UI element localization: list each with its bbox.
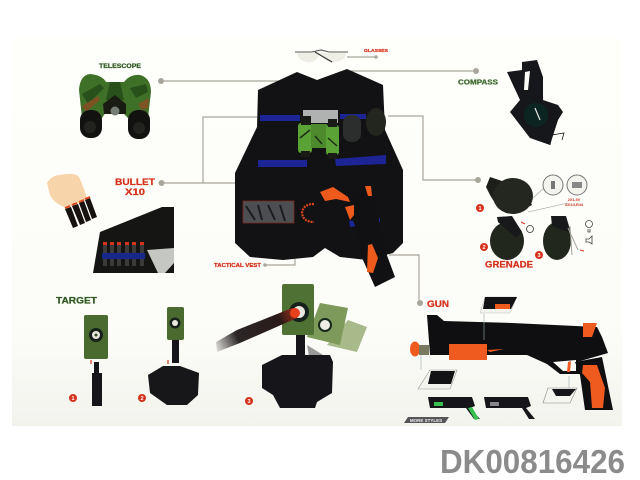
grenade 1 [476, 177, 533, 214]
heading: telescope: TELESCOPE [99, 63, 142, 70]
gun callout top [480, 297, 517, 340]
connector lines [158, 55, 481, 306]
badge 3 [245, 397, 253, 405]
trigger guard opening [553, 360, 576, 371]
target step 2 [138, 307, 199, 405]
tactical vest [235, 69, 403, 287]
vest holster gun [320, 185, 395, 287]
grenade battery callouts: 2X1.5V [568, 198, 580, 202]
badge 2: 2 [140, 396, 144, 402]
gun [410, 315, 613, 410]
icon: fist with bullet wristband [47, 174, 97, 228]
heading: bullet x10 [115, 177, 155, 198]
badge 1: 1 [71, 396, 75, 402]
icon: telescope binoculars [79, 74, 151, 139]
gun callout right [543, 376, 577, 403]
vest pocket [243, 201, 294, 223]
heading: compass: COMPASS [458, 80, 498, 86]
target step 3 [216, 284, 367, 408]
heading: tactical vest: TACTICAL VEST [214, 263, 262, 269]
background panel [12, 38, 622, 426]
vest binoculars [298, 110, 339, 159]
more styles badge [404, 417, 449, 423]
badge 1: 1 [478, 206, 482, 212]
heading: bullet x10: X10 [125, 187, 145, 198]
grenade battery callouts: AG13,R44 [565, 203, 584, 207]
grenade 3 [535, 216, 584, 260]
heading: bullet x10: BULLET [115, 177, 155, 188]
grenade battery callouts [528, 175, 587, 212]
vest compass [343, 115, 361, 142]
gun muzzle [410, 342, 420, 356]
gun orange parts [449, 344, 487, 360]
vest body [235, 69, 403, 260]
badge 3: 3 [247, 399, 251, 405]
heading: target: TARGET [56, 296, 98, 306]
heading: grenade: GRENADE [485, 260, 533, 270]
icon: compass [507, 60, 564, 145]
vest patch [302, 204, 314, 222]
gun grip [575, 357, 613, 410]
gun style grey [484, 397, 535, 419]
grenade 2 [480, 216, 534, 260]
icon: glasses [295, 50, 348, 62]
badge 3: 3 [537, 253, 541, 259]
heading: glasses: GLASSES [364, 48, 389, 54]
product code: DK00816426 [440, 443, 625, 480]
vest grenade [366, 108, 386, 136]
icon: bullet pouch [93, 207, 174, 273]
icons: light and sound [586, 220, 592, 244]
more styles badge: MORE STYLES [410, 418, 442, 423]
gun body [427, 315, 608, 374]
badge 2: 2 [482, 245, 486, 251]
vest blue straps [258, 114, 386, 227]
gun callout left [418, 355, 457, 389]
target step 1 [69, 315, 108, 406]
gun style green [428, 397, 480, 420]
heading: gun: GUN [427, 299, 449, 309]
